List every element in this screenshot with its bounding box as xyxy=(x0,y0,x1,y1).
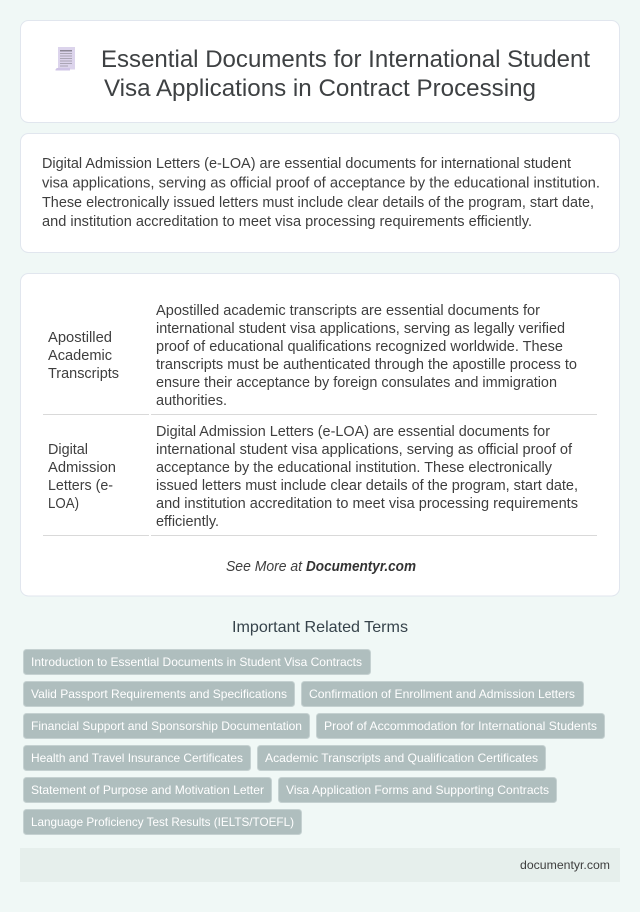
chip: Health and Travel Insurance Certificates xyxy=(31,751,243,765)
text block: introduction paragraph: Digital Admission Letters (e-LOA) are essential documents for international student xyxy=(42,156,571,172)
row description xyxy=(156,303,577,409)
row description xyxy=(156,424,578,530)
row label xyxy=(48,330,119,382)
chip xyxy=(24,746,250,770)
row description: Apostilled academic transcripts are essential documents for xyxy=(156,303,540,319)
chip: Confirmation of Enrollment and Admission Letters xyxy=(309,687,575,701)
row description: proof of educational qualifications recognized worldwide. These xyxy=(156,339,563,355)
footer source text: documentyr.com xyxy=(520,858,610,872)
chip xyxy=(24,714,310,738)
title xyxy=(101,46,590,102)
title: Essential Documents for International Student xyxy=(101,46,590,73)
chip xyxy=(258,746,546,770)
row description: efficiently. xyxy=(156,514,219,530)
row label: Admission xyxy=(48,460,116,476)
row description: acceptance by the educational institution. These electronically xyxy=(156,460,553,476)
panel: title card xyxy=(20,20,620,122)
related terms chips xyxy=(24,650,604,834)
text block: introduction paragraph: and institution accreditation to meet visa processing requirements efficiently. xyxy=(42,214,532,230)
chip: Statement of Purpose and Motivation Letter xyxy=(31,783,264,797)
text block: introduction paragraph: These electronically issued letters must include clear details of the program, start date, xyxy=(42,195,594,211)
chip: Proof of Accommodation for International Students xyxy=(324,719,597,733)
row label: Digital xyxy=(48,442,88,458)
row description: and institution accreditation to meet visa processing requirements xyxy=(156,496,578,512)
row description: issued letters must include clear details of the program, start date, xyxy=(156,478,578,494)
chip xyxy=(302,682,584,706)
chip: Valid Passport Requirements and Specifications xyxy=(31,687,287,701)
table row: digital admission letters xyxy=(48,424,578,530)
see more link: See More at xyxy=(226,559,303,575)
heading: important related terms: Important Related Terms xyxy=(232,619,408,636)
title: Visa Applications in Contract Processing xyxy=(104,75,536,102)
chip xyxy=(24,682,294,706)
chip xyxy=(24,778,272,802)
text block: introduction paragraph: visa applications, serving as official proof of acceptance by the educational institution. xyxy=(42,176,600,192)
table row: apostilled academic transcripts xyxy=(48,303,577,409)
see more link xyxy=(226,559,416,575)
panel: documents table xyxy=(20,274,620,596)
chip xyxy=(24,810,302,834)
row description: Digital Admission Letters (e-LOA) are essential documents for xyxy=(156,424,550,440)
see more link: Documentyr.com xyxy=(306,559,416,575)
chip: Visa Application Forms and Supporting Contracts xyxy=(286,783,549,797)
text block: introduction paragraph xyxy=(42,156,600,230)
row label: Transcripts xyxy=(48,366,119,382)
footer xyxy=(20,848,620,882)
row description: authorities. xyxy=(156,393,227,409)
icon: document scroll xyxy=(56,47,75,70)
chip: Language Proficiency Test Results (IELTS/TOEFL) xyxy=(31,815,294,829)
row label xyxy=(48,442,116,512)
chip xyxy=(316,714,604,738)
row description: international student visa applications, serving as official proof of xyxy=(156,442,572,458)
row label: Apostilled xyxy=(48,330,112,346)
row description: ensure their acceptance by foreign consulates and immigration xyxy=(156,375,557,391)
panel: introduction xyxy=(20,134,620,252)
row label: Academic xyxy=(48,348,112,364)
row description: transcripts must be authenticated through the apostille process to xyxy=(156,357,577,373)
chip xyxy=(278,778,556,802)
row label: LOA) xyxy=(48,496,79,512)
chip: Financial Support and Sponsorship Documentation xyxy=(31,719,302,733)
chip xyxy=(24,650,370,674)
row description: international student visa applications, serving as legally verified xyxy=(156,321,565,337)
row label: Letters (e- xyxy=(48,478,113,494)
chip: Academic Transcripts and Qualification Certificates xyxy=(265,751,538,765)
chip: Introduction to Essential Documents in Student Visa Contracts xyxy=(31,655,362,669)
